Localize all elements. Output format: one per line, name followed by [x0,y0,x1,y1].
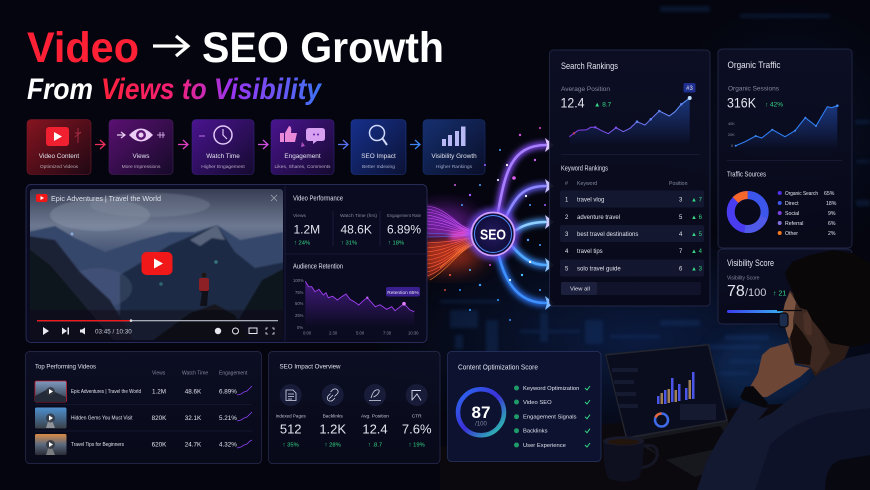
ear [803,312,812,335]
audience retention chart: 100% [293,278,304,283]
flow step: SEO Impact [351,120,406,174]
audience retention chart: 25% [295,313,304,318]
flow step: Video Content: Video Content [39,153,79,160]
metric: indexed pages: Indexed Pages [276,414,306,418]
panel: organic traffic: Organic Sessions [728,86,780,92]
keyword rankings table: 5 [565,266,569,272]
flow step: Watch Time: Watch Time [206,153,240,160]
checklist: Keyword Optimization [523,386,579,392]
panel: top performing videos: Engagement [219,370,248,376]
legend: traffic sources: 18% [826,201,837,207]
checklist: Video SEO [523,400,552,406]
legend: traffic sources: 2% [828,231,836,237]
subtitle: From Views to Visibility: Views to Visibility [101,73,322,106]
hand [750,343,810,397]
panel: search rankings: 12.4 [560,94,585,110]
metric: backlinks: Backlinks [323,414,343,420]
hair [785,250,870,347]
audience retention chart: 7:30 [383,330,392,336]
shirt shadow [755,408,870,490]
keyword rankings table: ▲ 6 [691,215,703,221]
keyword rankings table: 6 [679,266,683,272]
panel: SEO impact overview: SEO Impact Overview [280,364,341,370]
video player [28,187,285,342]
audience retention chart: 10:30 [408,330,419,336]
panel: visibility score: 78 [727,283,745,300]
metric: backlinks: ↑ 28% [325,442,341,448]
watch [740,386,768,408]
subtitle: From Views to Visibility [27,73,322,106]
panel: search rankings: Search Rankings [561,61,618,72]
keyword rankings table: best travel destinations [577,232,638,238]
process flow [27,120,485,174]
metric: average position: Avg. Position [361,414,389,420]
panel: content optimization score [448,352,601,462]
legend: traffic sources: Organic Search [785,191,818,197]
score ring: 87 [472,403,490,422]
keyword rankings table: travel vlog [577,198,604,204]
flow step: Engagement: Likes, Shares, Comments [274,164,331,170]
video title bar [36,194,277,203]
keyword rankings table: 1 [565,198,569,204]
arrow: step 5 to 6 [410,140,420,149]
metric: CTR: 7.6% [402,422,432,436]
metric: CTR: CTR [412,414,422,420]
row: Epic Adventures: 6.89% [219,388,237,396]
shirt [697,353,870,490]
row: Hidden Gems: Hidden Gems You Must Visit [71,416,133,422]
flow step: Views: More Impressions [122,164,161,170]
glasses [777,310,802,327]
row: Hidden Gems: 5.21% [219,415,237,422]
audience retention chart [293,262,420,336]
keyword rankings table: solo travel guide [577,266,621,272]
video performance stats: ↑ 31% [341,240,357,246]
video performance stats: Engagement Rate [387,213,421,219]
row: Epic Adventures [35,381,252,402]
flow step: Video Content [27,120,91,174]
neck [810,330,850,380]
keyword rankings table: Keyword [577,181,597,187]
row: Hidden Gems: 820K [152,415,167,422]
SEO hub [467,208,519,260]
keyword rankings table: adventure travel [577,215,620,221]
metric: indexed pages: 512 [280,422,302,436]
keyword rankings table: 2 [565,215,569,221]
icon: play button [142,252,172,275]
flow step: Views: Views [133,153,149,160]
arrow: step 4 to 5 [338,140,348,149]
panel: visibility score: Visibility Score [727,258,774,269]
checklist: Engagement Signals [523,415,577,421]
arrows: SEO hub to panels [498,138,554,310]
metric: backlinks: 1.2K [319,422,346,436]
keyword rankings table: ▲ 4 [691,249,703,255]
panel: organic traffic: Organic Traffic [728,60,781,71]
panel: organic traffic: Traffic Sources [727,170,766,178]
video performance stats: Watch Time (hrs) [340,213,377,219]
view all button: View all [570,286,590,292]
video controls [43,327,274,336]
row: Travel Tips: 24.7K [185,442,202,448]
row: Hidden Gems: 32.1K [185,415,202,422]
arrow: step 3 to 4 [258,140,268,149]
panel: top performing videos: Top Performing Videos [35,364,97,370]
row: Epic Adventures: 48.6K [185,388,202,396]
metric: average position: ↑ .8.7 [368,442,382,448]
arrow: title arrow [153,36,188,56]
video performance stats: ↑ 18% [388,240,404,246]
keyword rankings table: 3 [565,232,569,238]
legend: traffic sources: Social [785,211,799,217]
average position chart: #3 [686,86,693,92]
keyword rankings table: Position [669,181,688,187]
panel: video and performance [26,184,427,342]
title: Video to SEO Growth: Video [27,24,139,72]
audience retention chart: Retention 65% [387,290,419,296]
organic sessions chart: 0 [731,144,733,148]
video title bar: Epic Adventures | Travel the World [51,194,161,203]
view all button [561,282,701,295]
metric: average position: 12.4 [362,422,388,436]
beard [790,323,812,365]
keyword rankings table: 3 [679,198,683,204]
metric: indexed pages [276,384,306,448]
video performance stats: 1.2M [294,222,320,236]
keyword rankings table: ▲ 5 [691,232,703,238]
row: Travel Tips: Travel Tips for Beginners [71,442,124,448]
person at laptop [697,250,870,490]
flow step: Visibility Growth: Higher Rankings [436,164,473,170]
row: Epic Adventures: 1.2M [152,388,166,396]
flow step: SEO Impact: Better Indexing [362,164,395,170]
flow step: Engagement: Engagement [284,153,321,160]
audience retention chart: 0:00 [303,330,312,336]
panel: search rankings: ▲ 8.7 [594,102,612,108]
legend: traffic sources: Referral [785,221,803,227]
audience retention chart: 2:30 [329,330,338,336]
data stream into SEO hub [415,205,482,280]
legend: traffic sources: Other [785,231,798,237]
metric: backlinks [319,384,346,448]
panel: top performing videos: Watch Time [182,370,208,376]
audience retention chart: 75% [295,290,304,295]
coffee mug [603,436,657,482]
organic sessions chart: 20K [728,133,735,137]
flow step: SEO Impact: SEO Impact [361,153,396,160]
panel: visibility score: Visibility Score [727,276,760,282]
panel: SEO impact overview [268,352,440,464]
panel: search rankings: Average Position [561,86,610,93]
metric: CTR: ↑ 19% [409,442,425,448]
flow step: Video Content: Optimized Videos [40,164,79,170]
panel: visibility score: ↑ 21 [773,290,786,298]
legend: traffic sources [778,191,837,237]
keyword rankings table: 4 [679,232,683,238]
flow step: Engagement [271,120,334,174]
panel: organic traffic [718,49,852,248]
legend: traffic sources: 65% [824,191,835,197]
score ring [458,389,504,435]
chair [825,455,870,490]
audience retention chart: 5:00 [356,330,365,336]
audience retention chart: Audience Retention [293,262,343,270]
flow step: Visibility Growth [423,120,485,174]
keyword rankings table: ▲ 7 [691,198,703,204]
flow step: Visibility Growth: Visibility Growth [431,153,477,160]
row: Travel Tips [35,434,252,455]
video performance stats: Video Performance [293,194,343,202]
panel: organic traffic: 316K [727,94,757,110]
panel: visibility score: /100 [745,287,766,299]
face [783,290,830,373]
legend: traffic sources: 9% [828,211,836,217]
metric: CTR [402,384,432,448]
SEO hub: SEO [480,226,506,244]
metric: indexed pages: ↑ 35% [283,442,299,448]
checklist: Backlinks [523,429,548,435]
title: Video to SEO Growth [27,24,444,72]
flow step: Watch Time [192,120,254,174]
arrow: step 2 to 3 [178,140,188,149]
keyword rankings table: 7 [679,249,683,255]
metric: average position [361,384,389,448]
audience retention chart: 50% [295,301,304,306]
video performance stats: ↑ 24% [294,240,310,246]
arrow: step 1 to 2 [95,140,105,149]
legend: traffic sources: 6% [828,221,836,227]
keyword rankings table: 5 [679,215,683,221]
donut chart: traffic sources [731,195,765,229]
face lit edge [783,292,796,340]
video performance stats: 48.6K [340,222,372,236]
organic sessions chart [728,104,839,150]
video performance stats: 6.89% [387,222,421,236]
laptop [605,344,728,477]
row: Travel Tips: 620K [152,442,167,448]
flow step: Views [109,120,173,174]
video controls: 03:45 / 10:30 [95,328,132,336]
average position chart [569,83,696,146]
panel: visibility score [718,249,852,324]
row: Travel Tips: 4.32% [219,442,237,448]
subtitle: From Views to Visibility: From [27,73,93,106]
panel: organic traffic: ↑ 42% [765,102,783,108]
keyword rankings table: Keyword Rankings [561,164,608,172]
keyword rankings table: 4 [565,249,569,255]
keyword rankings table: travel tips [577,249,603,255]
organic sessions chart: 40K [728,122,735,126]
keyword rankings table [560,164,704,276]
title: Video to SEO Growth: SEO Growth [202,24,444,72]
audience retention chart: 0% [297,325,303,330]
flow step: Watch Time: Higher Engagement [201,164,245,170]
particles [444,127,546,321]
panel: search rankings [550,50,710,306]
checklist: User Experience [523,443,566,449]
panel: top performing videos [26,352,262,464]
row: Epic Adventures: Epic Adventures | Travel the World [71,389,141,395]
video performance stats [285,186,427,341]
keyword rankings table: # [565,181,568,187]
panel: top performing videos: Views [152,370,166,376]
keyword rankings table: ▲ 3 [691,266,703,272]
panel: content optimization score: Content Optimization Score [458,362,538,372]
video performance stats: Views [293,213,307,219]
row: Hidden Gems [35,408,252,428]
score ring: /100 [475,422,487,428]
video progress bar [37,319,278,322]
legend: traffic sources: Direct [785,201,799,207]
checklist [514,386,590,449]
